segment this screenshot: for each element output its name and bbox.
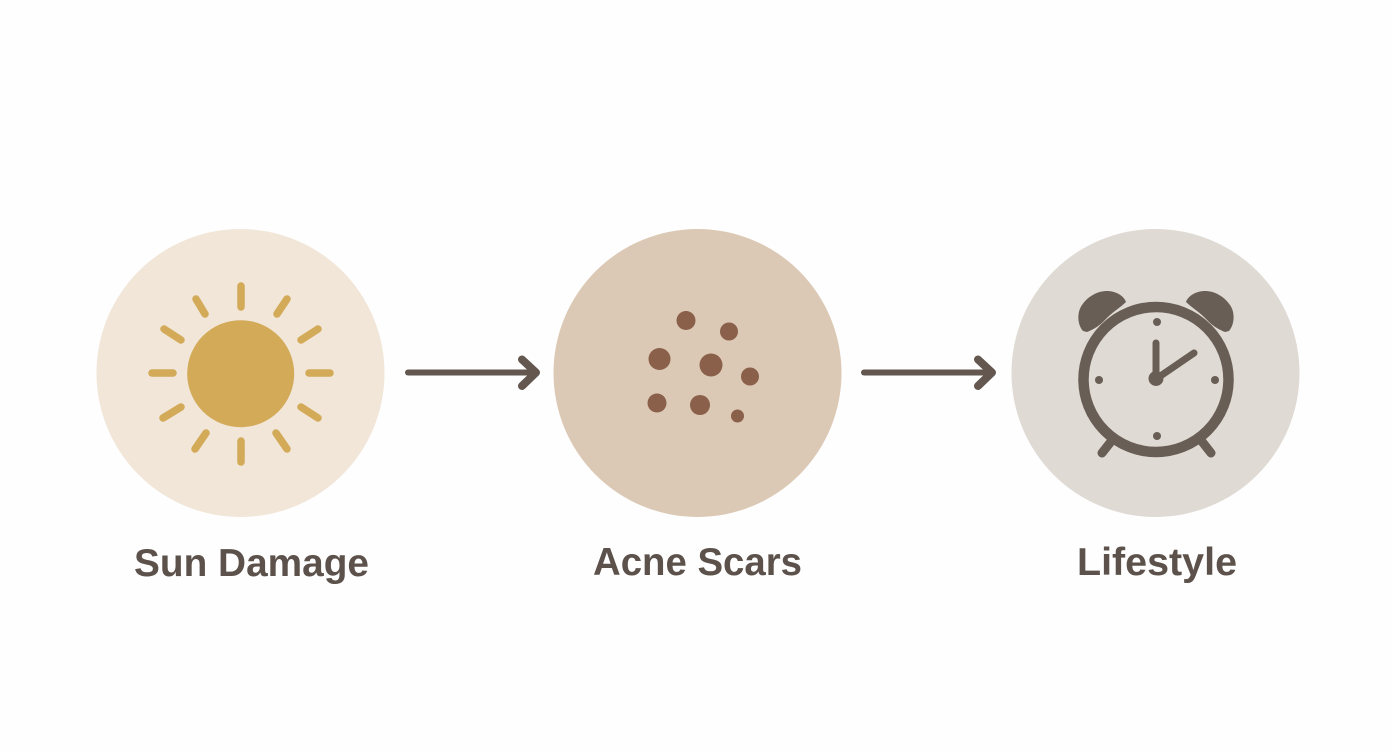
clock legs: [1102, 439, 1211, 453]
label: Sun Damage: Sun Damage: [134, 542, 369, 585]
panel: acne scars: [554, 229, 842, 584]
panel: sun damage: [96, 229, 384, 585]
clock face: [1084, 307, 1228, 452]
circle: acne scars background: [554, 229, 842, 517]
label: Lifestyle: Lifestyle: [1077, 541, 1237, 584]
panel: lifestyle: [1012, 229, 1300, 584]
hour markers: [1095, 318, 1219, 440]
arrow: acne scars to lifestyle: [864, 360, 992, 386]
clock hub: [1148, 371, 1164, 386]
label: Acne Scars: Acne Scars: [593, 541, 802, 584]
icon: alarm clock: [1078, 291, 1234, 453]
circle: lifestyle background: [1012, 229, 1300, 517]
icon: sun: [152, 286, 330, 462]
arrow: sun damage to acne scars: [408, 360, 536, 386]
circle: sun damage background: [96, 229, 384, 517]
clock bells: [1078, 291, 1234, 332]
icon: acne scar dots: [648, 311, 759, 422]
clock hands: [1156, 343, 1194, 379]
